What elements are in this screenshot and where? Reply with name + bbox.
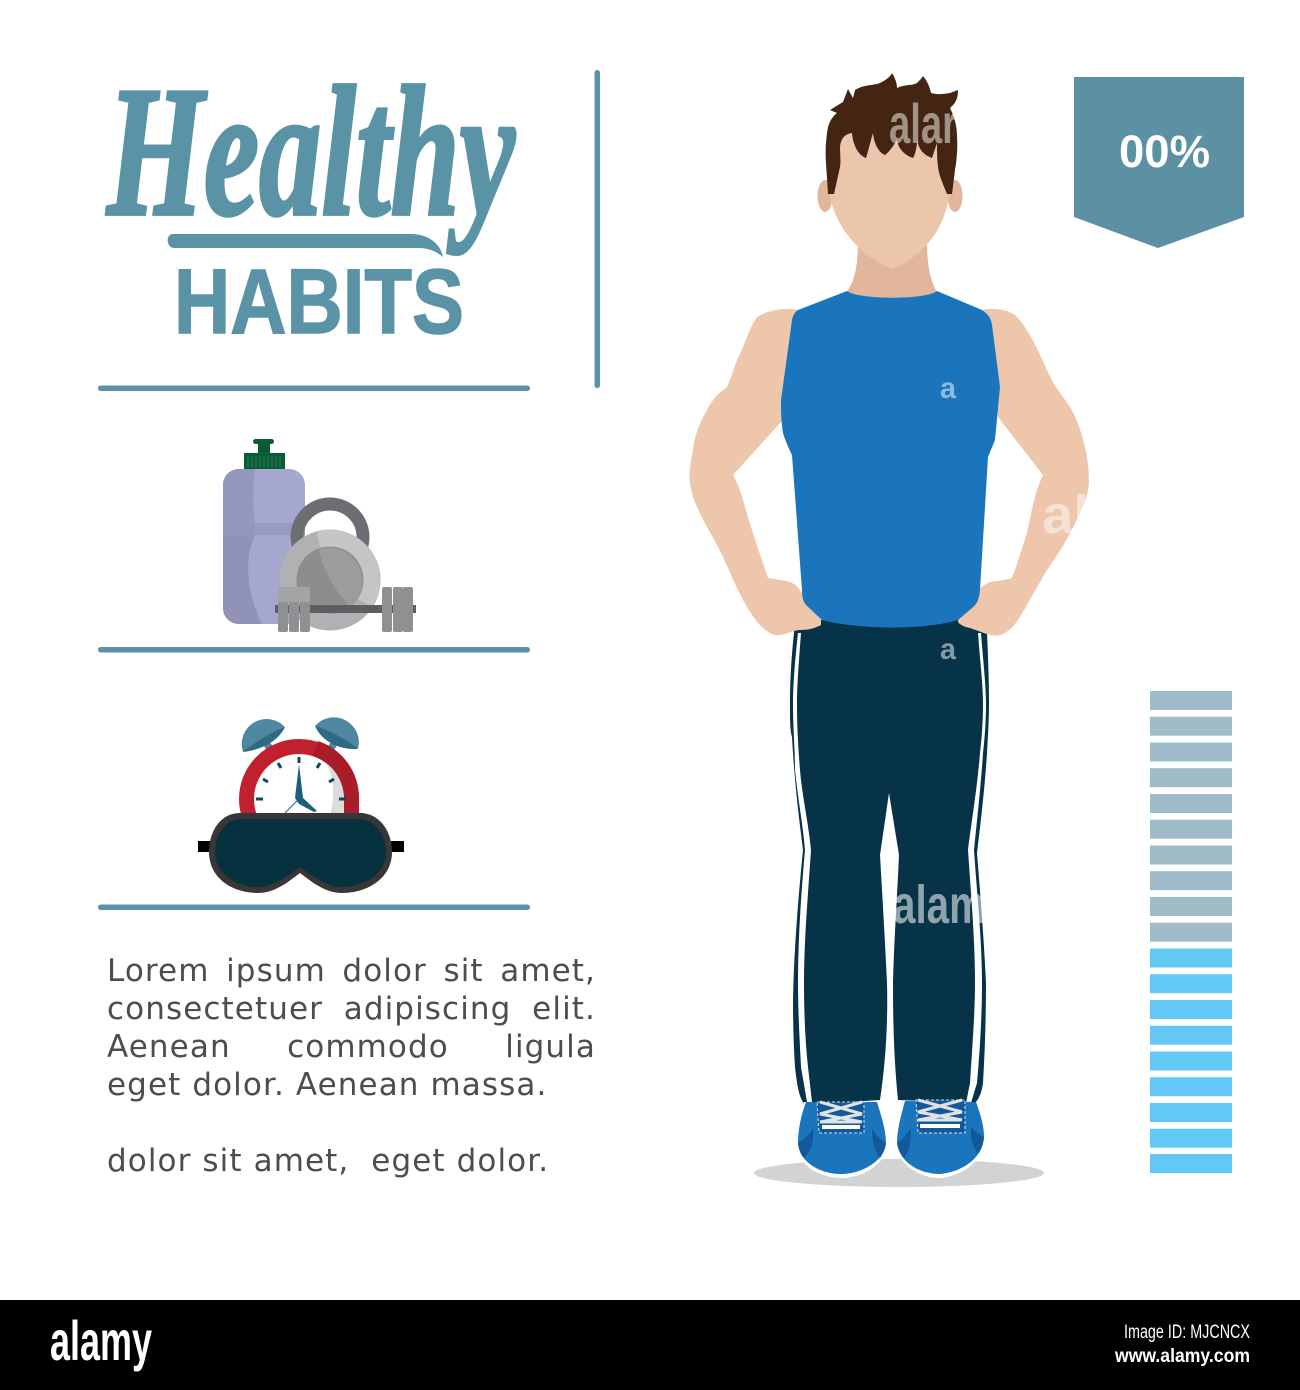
footer url: www.alamy.com	[1114, 1346, 1250, 1367]
footer logo: alamy	[50, 1309, 152, 1372]
shirt	[781, 291, 1000, 628]
alarm bells	[242, 717, 359, 752]
badge: percentage	[1074, 77, 1244, 248]
kettlebell ball	[280, 529, 380, 630]
bottle cap	[244, 439, 285, 469]
face	[830, 125, 949, 269]
footer bar	[0, 1300, 1300, 1390]
watermark marks: a	[940, 633, 956, 666]
progress bar: segmented gauge	[1150, 691, 1232, 1173]
watermark marks	[889, 92, 1089, 935]
title underline swoosh	[168, 234, 443, 257]
body text: eget dolor. Aenean massa.	[107, 1067, 547, 1103]
shoe: right	[895, 1100, 986, 1178]
divider under fitness icon	[98, 647, 530, 652]
watermark marks: al	[1042, 485, 1089, 545]
bottle body	[223, 469, 305, 624]
arm: right	[958, 309, 1089, 636]
badge: percentage: 00%	[1119, 126, 1210, 177]
pants stripe: right	[966, 633, 986, 1103]
title script word: Healthy: Healthy	[105, 49, 516, 255]
hair	[826, 73, 958, 194]
icon: water bottle, kettlebell and dumbbell	[223, 439, 416, 632]
icon: alarm clock and sleep mask	[198, 717, 404, 893]
watermark marks: alar	[889, 92, 957, 155]
dumbbell	[275, 587, 416, 632]
body text: dolor sit amet, eget dolor.	[107, 1143, 549, 1179]
clock face shade	[326, 763, 344, 815]
shoe: left	[796, 1102, 888, 1178]
sleep mask	[209, 813, 392, 893]
pants stripe: left	[793, 633, 812, 1102]
divider under title	[98, 386, 530, 391]
clock ring	[246, 746, 352, 852]
body text: Aenean commodo ligula	[107, 1029, 596, 1065]
divider under sleep icon	[98, 904, 530, 910]
body text: Lorem ipsum dolor sit amet,	[107, 953, 596, 989]
arm: left	[690, 309, 821, 635]
footer image id: Image ID: MJCNCX	[1124, 1322, 1250, 1343]
vertical divider	[594, 70, 600, 388]
body text: consectetuer adipiscing elit.	[107, 991, 596, 1027]
mask straps	[198, 841, 404, 852]
body text	[107, 953, 596, 1179]
watermark marks: alam	[893, 875, 985, 935]
title: Healthy Habits	[105, 49, 516, 353]
kettlebell handle	[297, 504, 363, 570]
clock ticks and hands	[256, 757, 346, 813]
pants	[790, 620, 989, 1105]
title word: HABITS: HABITS	[174, 251, 464, 353]
shoes	[796, 1100, 986, 1178]
ears	[818, 180, 962, 212]
figure: man in sportswear	[690, 73, 1089, 1187]
ground shadow	[754, 1159, 1044, 1187]
watermark marks: a	[940, 372, 956, 405]
neck	[847, 240, 937, 304]
